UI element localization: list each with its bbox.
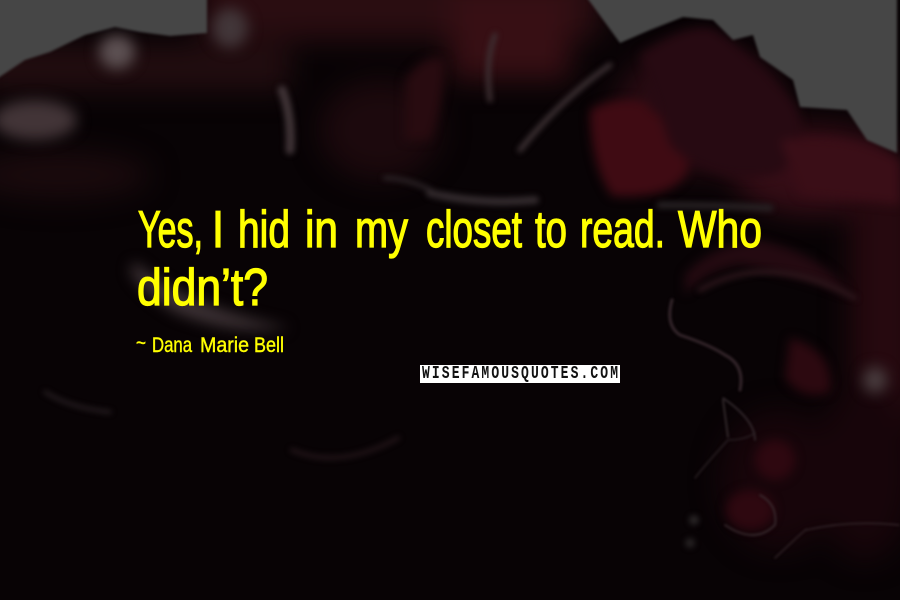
- small pale dots: [685, 515, 699, 548]
- grey backdrop corners: [0, 0, 897, 153]
- author attribution: Bell: [254, 334, 284, 357]
- mid-toned petals: [405, 28, 900, 530]
- author attribution: [136, 332, 284, 357]
- quote line 1: I: [212, 201, 224, 259]
- quote line 1: to: [535, 201, 567, 259]
- quote line 2: didn’t?: [137, 259, 268, 317]
- quote line 1: Yes,: [138, 201, 203, 259]
- author attribution: Marie: [200, 334, 249, 357]
- quote line 1: hid: [238, 201, 290, 259]
- logo: wisefamousquotes: WISEFAMOUSQUOTES.COM: [422, 363, 618, 384]
- quote line 1: [138, 201, 762, 259]
- petal edge highlights: [45, 35, 855, 458]
- quote line 1: closet: [426, 201, 522, 259]
- author attribution: ~: [136, 332, 146, 355]
- quote line 1: read.: [580, 201, 665, 259]
- quote text: [137, 201, 762, 317]
- thin bright petal outlines: [670, 300, 899, 558]
- quote line 1: Who: [678, 201, 762, 259]
- pale blurred highlights: [0, 8, 887, 393]
- quote line 1: my: [355, 201, 408, 259]
- quote line 1: in: [305, 201, 338, 259]
- author attribution: Dana: [152, 334, 192, 357]
